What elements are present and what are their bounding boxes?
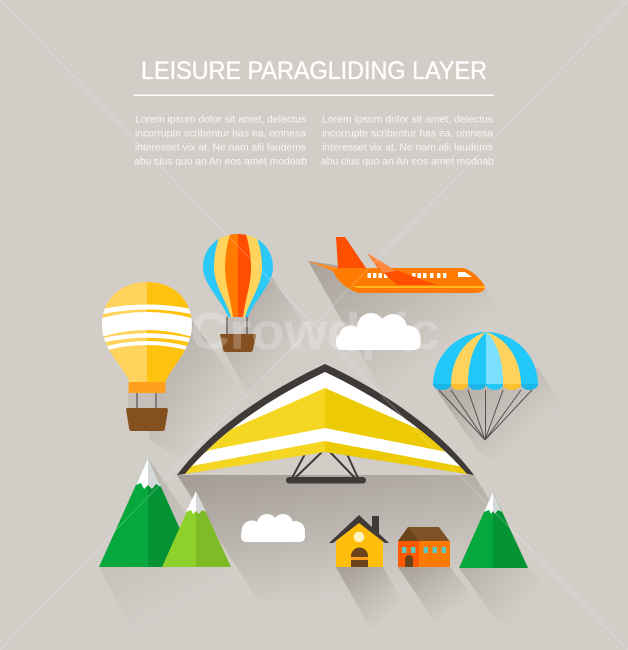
icon: large cloud — [336, 313, 420, 350]
icon: right mountain — [459, 492, 528, 568]
icon: airplane — [308, 237, 485, 293]
title: LEISURE PARAGLIDING LAYER — [141, 57, 487, 85]
text block: right column — [321, 114, 494, 168]
icon: small striped balloon — [203, 234, 273, 352]
icon: green mountain — [99, 458, 197, 567]
text block: right column: Lorem ipsum dolor sit amet, delectus — [322, 114, 493, 126]
text block: right column: interesset vix at. Ne nam alii laudems — [322, 142, 493, 154]
title rule — [134, 94, 494, 96]
text block: left column — [134, 114, 307, 168]
text block: left column: interesset vix at. Ne nam alii laudems — [135, 142, 306, 154]
text block: right column: abu cius quo an An eos amet modoab — [321, 156, 494, 168]
icon: orange building — [398, 527, 450, 567]
text block: left column: Lorem ipsum dolor sit amet, delectus — [135, 114, 306, 126]
icon: small cloud — [241, 514, 305, 542]
icon: light green mountain — [162, 491, 231, 567]
long shadows — [99, 261, 590, 640]
icon: large yellow balloon — [100, 280, 194, 431]
watermark text: Crowdpic — [190, 303, 440, 361]
icon: parachute — [433, 332, 538, 440]
icon: hang glider — [170, 364, 480, 484]
text block: left column: abu cius quo an An eos amet modoab — [134, 156, 307, 168]
text block: right column: incorrupte scribentur has ea, omnesa — [322, 128, 493, 140]
icon: yellow house — [329, 515, 389, 567]
text block: left column: incorrupte scribentur has ea, omnesa — [135, 128, 306, 140]
